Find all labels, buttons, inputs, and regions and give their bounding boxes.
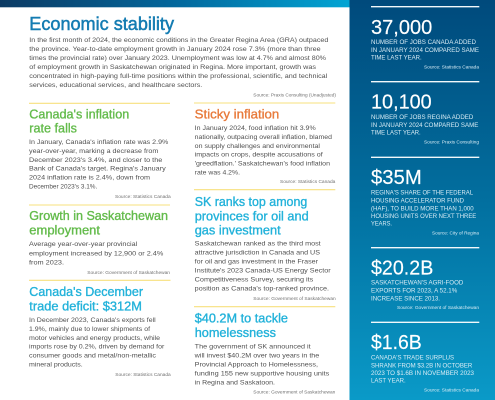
body text: December 2023's 3.1%. bbox=[29, 184, 97, 190]
body text: Average year-over-year provincial bbox=[29, 241, 138, 248]
description: (HAF), TO BUILD MORE THAN 1,000 bbox=[371, 205, 474, 212]
heading: Sticky inflation bbox=[195, 106, 279, 121]
panel: Growth in Saskatchewan employment bbox=[29, 208, 171, 275]
body text: attractive jurisdiction in Canada and US bbox=[195, 250, 321, 257]
source: Source: Statistics Canada bbox=[115, 372, 171, 377]
number: $35M bbox=[371, 167, 422, 189]
body text: December 2023's 3.4%, and closer to the bbox=[29, 157, 163, 164]
body text: Provincial Approach to Homelessness, bbox=[195, 362, 318, 369]
heading bbox=[195, 310, 288, 340]
description: HOUSING UNITS OVER NEXT THREE bbox=[371, 213, 476, 220]
body text bbox=[195, 125, 332, 176]
top gradient bar bbox=[0, 0, 350, 7]
body text bbox=[29, 241, 163, 266]
description: 2023 TO $1.6B IN NOVEMBER 2023 bbox=[371, 370, 475, 377]
body text: on supply challenges and environmental bbox=[195, 143, 321, 150]
description: NUMBER OF JOBS CANADA ADDED bbox=[371, 39, 477, 46]
number: 37,000 bbox=[371, 17, 432, 39]
body text: year-over-year, marking a decrease from bbox=[29, 148, 159, 155]
body text bbox=[194, 344, 330, 386]
stat: $1.6B bbox=[371, 332, 480, 393]
heading: provinces for oil and bbox=[195, 208, 309, 223]
intro text: services, educational services, and healthcare sectors. bbox=[29, 82, 202, 89]
number: 10,100 bbox=[371, 92, 432, 114]
body text: Institute's 2023 Canada-US Energy Sector bbox=[195, 268, 332, 275]
heading: SK ranks top among bbox=[195, 194, 307, 209]
description: HOUSING ACCELERATOR FUND bbox=[371, 198, 465, 205]
sidebar background bbox=[350, 0, 495, 400]
body text: The government of SK announced it bbox=[195, 344, 311, 351]
description bbox=[371, 39, 479, 62]
body text bbox=[29, 317, 165, 369]
heading: gas investment bbox=[195, 222, 281, 237]
source: Source: Government of Saskatchewan bbox=[253, 390, 336, 395]
description: REGINA'S SHARE OF THE FEDERAL bbox=[371, 190, 474, 197]
panel: $40.2M to tackle homelessness bbox=[194, 310, 336, 395]
intro text bbox=[29, 37, 329, 89]
heading: Canada's inflation bbox=[29, 106, 129, 121]
heading bbox=[195, 194, 309, 237]
number: $1.6B bbox=[371, 332, 422, 354]
source: Source: Praxis Consulting (Unadjusted) bbox=[253, 92, 337, 98]
heading: trade deficit: $312M bbox=[29, 298, 142, 313]
intro text: times the provincial rate) over January 2023. Unemployment was low at 4.7% and almost 80% bbox=[29, 55, 326, 62]
body text: 'greedflation.' Saskatchewan's food inflation bbox=[195, 160, 330, 168]
number: $20.2B bbox=[371, 257, 433, 279]
heading bbox=[29, 106, 129, 136]
body text: mineral products. bbox=[29, 362, 83, 369]
source: Source: Statistics Canada bbox=[280, 179, 336, 184]
description bbox=[371, 190, 476, 228]
body text: Saskatchewan ranked as the third most bbox=[195, 241, 321, 248]
description: CANADA'S TRADE SURPLUS bbox=[371, 355, 454, 362]
body text: In January 2024, food inflation hit 3.9% bbox=[195, 125, 316, 132]
source: Source: Government of Saskatchewan bbox=[253, 296, 336, 301]
stat: 37,000 bbox=[371, 17, 480, 69]
heading: Growth in Saskatchewan bbox=[29, 208, 168, 223]
body text: funding 155 new supportive housing units bbox=[195, 371, 330, 378]
body text: motor vehicles and energy products, while bbox=[29, 335, 160, 342]
body text: Competitiveness Survey, securing its bbox=[195, 277, 314, 284]
heading: employment bbox=[29, 222, 100, 238]
source: Source: Government of Saskatchewan bbox=[87, 270, 171, 275]
panel: Sticky inflation bbox=[195, 106, 336, 184]
source: Source: City of Regina bbox=[432, 230, 480, 235]
body text: 1.9%, mainly due to lower shipments of bbox=[29, 326, 150, 333]
description: TIME LAST YEAR. bbox=[371, 130, 421, 137]
body text: 2024 inflation rate is 2.4%, down from bbox=[29, 174, 151, 182]
intro text: the province. Year-to-date employment growth in January 2024 rose 7.3% (more than three bbox=[29, 46, 321, 53]
intro text: concentrated in high-paying full-time positions within the professional, scientific, and technical bbox=[29, 73, 328, 80]
description bbox=[371, 114, 478, 137]
description: IN JANUARY 2024 COMPARED SAME bbox=[371, 122, 478, 129]
description: INCREASE SINCE 2013. bbox=[371, 296, 440, 303]
intro text: In the first month of 2024, the economic conditions in the Greater Regina Area (GRA) outpaced bbox=[29, 37, 329, 44]
description: LAST YEAR. bbox=[371, 378, 406, 385]
description: TIME LAST YEAR. bbox=[371, 55, 422, 62]
body text bbox=[29, 139, 168, 190]
body text: rate was 4.2%. bbox=[195, 169, 240, 176]
panel: key statistics sidebar bbox=[350, 0, 495, 400]
panel: economic stability intro bbox=[29, 13, 337, 98]
heading: Canada's December bbox=[29, 284, 144, 299]
body text: position as Canada's top-ranked province. bbox=[195, 286, 329, 293]
body text: impacts on crops, despite accusations of bbox=[195, 152, 323, 158]
body text: imports rose by 0.2%, driven by demand for bbox=[29, 344, 165, 351]
description bbox=[371, 355, 475, 385]
panel: Canada's inflation rate falls bbox=[29, 106, 171, 199]
description: EXPORTS FOR 2023, A 52.1% bbox=[371, 288, 458, 295]
body text: Bank of Canada's target. Regina's January bbox=[29, 166, 166, 173]
description: YEARS. bbox=[371, 221, 392, 228]
stat: $20.2B bbox=[371, 257, 480, 310]
description: SASKATCHEWAN'S AGRI-FOOD bbox=[371, 280, 464, 287]
source: Source: Government of Saskatchewan bbox=[397, 305, 480, 310]
heading bbox=[29, 208, 168, 238]
body text: In December 2023, Canada's exports fell bbox=[29, 317, 156, 324]
panel: SK ranks top among provinces bbox=[195, 194, 336, 301]
stat: $35M bbox=[371, 167, 480, 235]
description bbox=[371, 280, 464, 303]
description: IN JANUARY 2024 COMPARED SAME bbox=[371, 47, 479, 54]
body text: for oil and gas investment in the Fraser bbox=[195, 259, 319, 266]
heading bbox=[29, 284, 144, 313]
source: Source: Praxis Consulting bbox=[424, 139, 480, 144]
heading: rate falls bbox=[29, 121, 77, 136]
title: Economic stability bbox=[29, 13, 175, 34]
body text: nationally, outpacing overall inflation, blamed bbox=[195, 134, 332, 141]
heading: homelessness bbox=[195, 325, 276, 340]
heading: $40.2M to tackle bbox=[195, 310, 288, 325]
body text: in Regina and Saskatoon. bbox=[195, 379, 275, 386]
description: NUMBER OF JOBS REGINA ADDED bbox=[371, 114, 474, 121]
stat: 10,100 bbox=[371, 92, 480, 144]
description: SHRANK FROM $3.2B IN OCTOBER bbox=[371, 362, 473, 369]
body text: consumer goods and metal/non-metallic bbox=[29, 353, 157, 360]
panel: Canada's December trade deficit bbox=[29, 284, 171, 377]
body text: will invest $40.2M over two years in the bbox=[194, 353, 320, 360]
body text bbox=[195, 241, 332, 293]
source: Source: Statistics Canada bbox=[424, 388, 480, 393]
intro text: of employment growth in Saskatchewan originated in Regina. More important, growth was bbox=[29, 64, 317, 71]
body text: In January, Canada's inflation rate was 2.9% bbox=[29, 139, 168, 146]
body text: from 2023. bbox=[29, 260, 64, 266]
source: Source: Statistics Canada bbox=[115, 194, 171, 199]
body text: employment increased by 12,900 or 2.4% bbox=[29, 250, 163, 258]
source: Source: Statistics Canada bbox=[424, 64, 480, 69]
